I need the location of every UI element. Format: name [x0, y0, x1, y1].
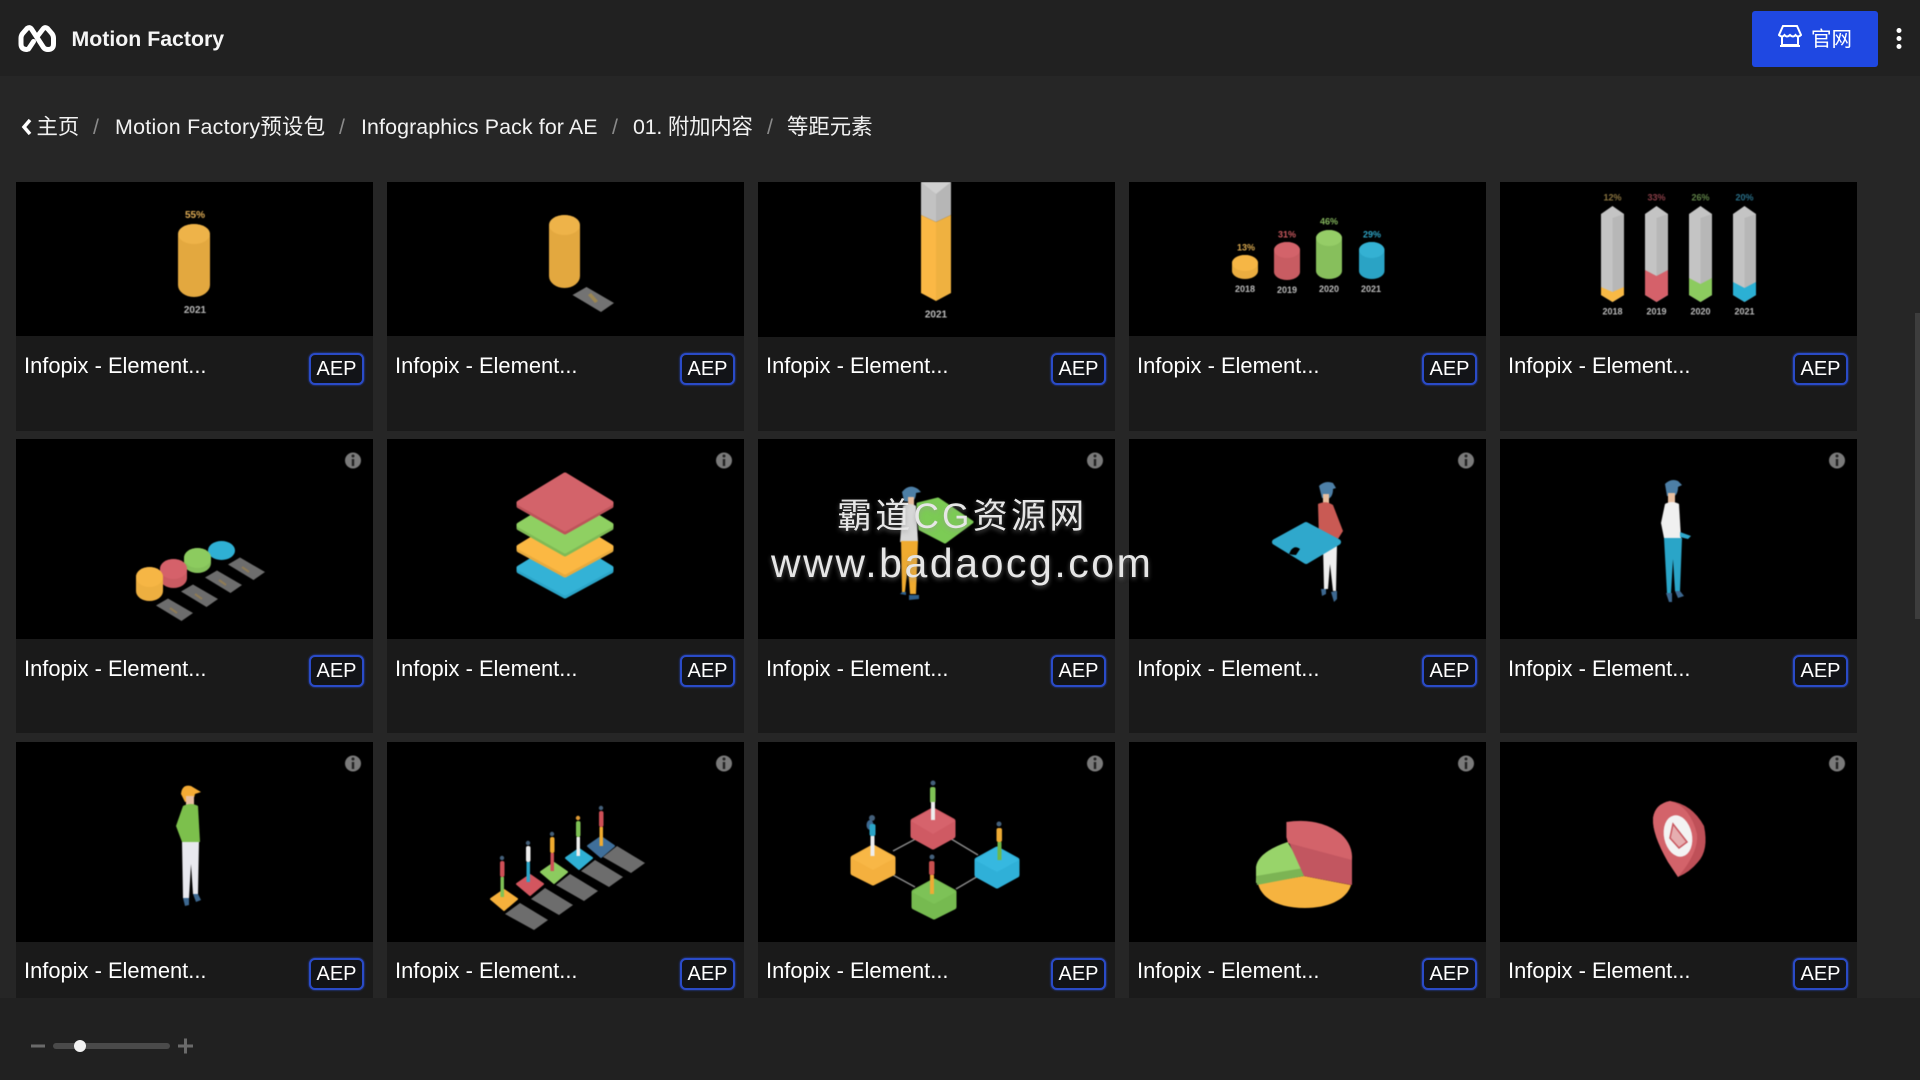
- badge: AEP: AEP: [1429, 963, 1470, 985]
- badge: AEP: AEP: [316, 963, 357, 985]
- badge: AEP: AEP: [687, 660, 728, 682]
- thumbnail: four cylinders chart: [1129, 182, 1486, 336]
- card: row 2 col 4: [1129, 439, 1486, 733]
- badge: AEP: AEP: [1429, 660, 1470, 682]
- card: row 1 col 1: [16, 182, 373, 431]
- crumb: isometric elements: 等距元素: [787, 115, 873, 139]
- badge: AEP: [1422, 353, 1477, 385]
- thumbnail: four cylinders chart: 2018: [1235, 284, 1255, 294]
- badge: AEP: [1051, 958, 1106, 990]
- crumb: home: 主页: [36, 115, 79, 139]
- badge: AEP: AEP: [316, 358, 357, 380]
- thumbnail: people on steps with tags: [387, 742, 744, 942]
- card title: Infopix - Element...: [24, 656, 207, 681]
- header bar: [0, 0, 1920, 76]
- icon: back chevron: [22, 118, 32, 136]
- crumb separator: /: [339, 115, 345, 139]
- thumbnail: single cylinder: 2021: [184, 305, 207, 316]
- thumbnail: tall isometric bar: [758, 182, 1115, 337]
- badge: AEP: [309, 958, 364, 990]
- card title: Infopix - Element...: [1137, 353, 1320, 378]
- crumb: extras: 01. 附加内容: [633, 115, 753, 139]
- badge: AEP: AEP: [1800, 358, 1841, 380]
- thumbnail: four isometric column bars: 2021: [1734, 306, 1755, 316]
- card: row 3 col 1: [16, 742, 373, 1036]
- card: row 2 col 2: [387, 439, 744, 733]
- badge: AEP: [680, 655, 735, 687]
- thumbnail: four isometric column bars: 20%: [1735, 192, 1754, 202]
- card title: Infopix - Element...: [1137, 958, 1320, 983]
- crumb separator: /: [93, 115, 99, 139]
- card title: Infopix - Element...: [24, 353, 207, 378]
- thumbnail: standing person in green: [16, 742, 373, 942]
- badge: AEP: [1793, 958, 1848, 990]
- card title: Infopix - Element...: [1137, 656, 1320, 681]
- watermark: url: www.badaocg.com: [771, 540, 1153, 586]
- icon: Motion Factory logo: [18, 25, 56, 52]
- badge: AEP: [309, 353, 364, 385]
- thumbnail: four isometric column bars: 2018: [1602, 306, 1623, 316]
- card: row 2 col 3: [758, 439, 1115, 733]
- badge: AEP: AEP: [1429, 358, 1470, 380]
- breadcrumb: [22, 115, 873, 139]
- thumbnail: four cylinders chart: 2020: [1319, 284, 1339, 294]
- badge: AEP: AEP: [316, 660, 357, 682]
- card title: Infopix - Element...: [1508, 958, 1691, 983]
- card title: Infopix - Element...: [395, 958, 578, 983]
- badge: AEP: [1051, 655, 1106, 687]
- thumbnail: four isometric column bars: [1500, 182, 1857, 336]
- card: row 3 col 3: [758, 742, 1115, 1036]
- badge: AEP: [1051, 353, 1106, 385]
- badge: AEP: [1793, 655, 1848, 687]
- card: row 1 col 2: [387, 182, 744, 431]
- thumbnail: four cylinders chart: 46%: [1320, 216, 1338, 226]
- badge: AEP: AEP: [687, 963, 728, 985]
- brand name: Motion Factory: [72, 27, 224, 51]
- card: row 2 col 1: [16, 439, 373, 733]
- badge: AEP: [680, 353, 735, 385]
- thumbnail: isometric map pin: [1500, 742, 1857, 942]
- thumbnail: four isometric column bars: 12%: [1603, 192, 1622, 202]
- thumbnail: four cylinders chart: 2021: [1361, 284, 1381, 294]
- badge: AEP: AEP: [687, 358, 728, 380]
- thumbnail: four isometric column bars: 33%: [1647, 192, 1666, 202]
- card title: Infopix - Element...: [766, 353, 949, 378]
- badge: AEP: AEP: [1800, 963, 1841, 985]
- thumbnail: four cylinders chart: 31%: [1278, 230, 1296, 240]
- card title: Infopix - Element...: [395, 656, 578, 681]
- zoom slider: [31, 1038, 193, 1054]
- thumbnail: standing person in white and teal: [1500, 439, 1857, 639]
- badge: AEP: [1422, 958, 1477, 990]
- card: row 3 col 5: [1500, 742, 1857, 1036]
- thumbnail: four isometric column bars: 2020: [1690, 306, 1711, 316]
- card title: Infopix - Element...: [395, 353, 578, 378]
- thumbnail: network of hexagons with people: [758, 742, 1115, 942]
- card: row 3 col 2: [387, 742, 744, 1036]
- card title: Infopix - Element...: [1508, 353, 1691, 378]
- thumbnail: isometric cylinders and tags: [16, 439, 373, 639]
- thumbnail: four cylinders chart: 13%: [1237, 242, 1255, 252]
- thumbnail: single cylinder: 55%: [185, 210, 205, 221]
- card title: Infopix - Element...: [1508, 656, 1691, 681]
- thumbnail: four cylinders chart: 29%: [1363, 230, 1381, 240]
- badge: AEP: AEP: [1058, 660, 1099, 682]
- thumbnail: person holding green puzzle: [758, 439, 1115, 639]
- footer with zoom slider: [0, 998, 1920, 1080]
- card: row 1 col 3: [758, 182, 1115, 431]
- thumbnail: single cylinder: [16, 182, 373, 336]
- scrollbar thumb: [1915, 313, 1920, 619]
- card: row 1 col 5: [1500, 182, 1857, 431]
- crumb: presets: Motion Factory预设包: [115, 115, 325, 139]
- card: row 1 col 4: [1129, 182, 1486, 431]
- crumb separator: /: [767, 115, 773, 139]
- badge: AEP: [1422, 655, 1477, 687]
- watermark: site name: 霸道CG资源网: [837, 497, 1088, 536]
- badge: AEP: AEP: [1058, 963, 1099, 985]
- button: official site: [1752, 11, 1878, 67]
- button label: 官网: [1811, 28, 1852, 51]
- card: row 2 col 5: [1500, 439, 1857, 733]
- card: row 3 col 4: [1129, 742, 1486, 1036]
- thumbnail: stacked isometric layers: [387, 439, 744, 639]
- thumbnail: four isometric column bars: 26%: [1691, 192, 1710, 202]
- thumbnail: tall isometric bar: 2021: [925, 310, 948, 320]
- card title: Infopix - Element...: [766, 958, 949, 983]
- icon: store: [1778, 25, 1802, 47]
- thumbnail: cylinder with tag: [387, 182, 744, 336]
- icon: more menu: [1896, 28, 1902, 49]
- badge: AEP: [1793, 353, 1848, 385]
- crumb: pack: Infographics Pack for AE: [361, 115, 598, 139]
- thumbnail: person with blue puzzle: [1129, 439, 1486, 639]
- thumbnail: isometric pie chart: [1129, 742, 1486, 942]
- badge: AEP: AEP: [1800, 660, 1841, 682]
- badge: AEP: AEP: [1058, 358, 1099, 380]
- card title: Infopix - Element...: [24, 958, 207, 983]
- card title: Infopix - Element...: [766, 656, 949, 681]
- badge: AEP: [680, 958, 735, 990]
- badge: AEP: [309, 655, 364, 687]
- thumbnail: four isometric column bars: 2019: [1646, 306, 1667, 316]
- crumb separator: /: [612, 115, 618, 139]
- thumbnail: four cylinders chart: 2019: [1277, 285, 1297, 295]
